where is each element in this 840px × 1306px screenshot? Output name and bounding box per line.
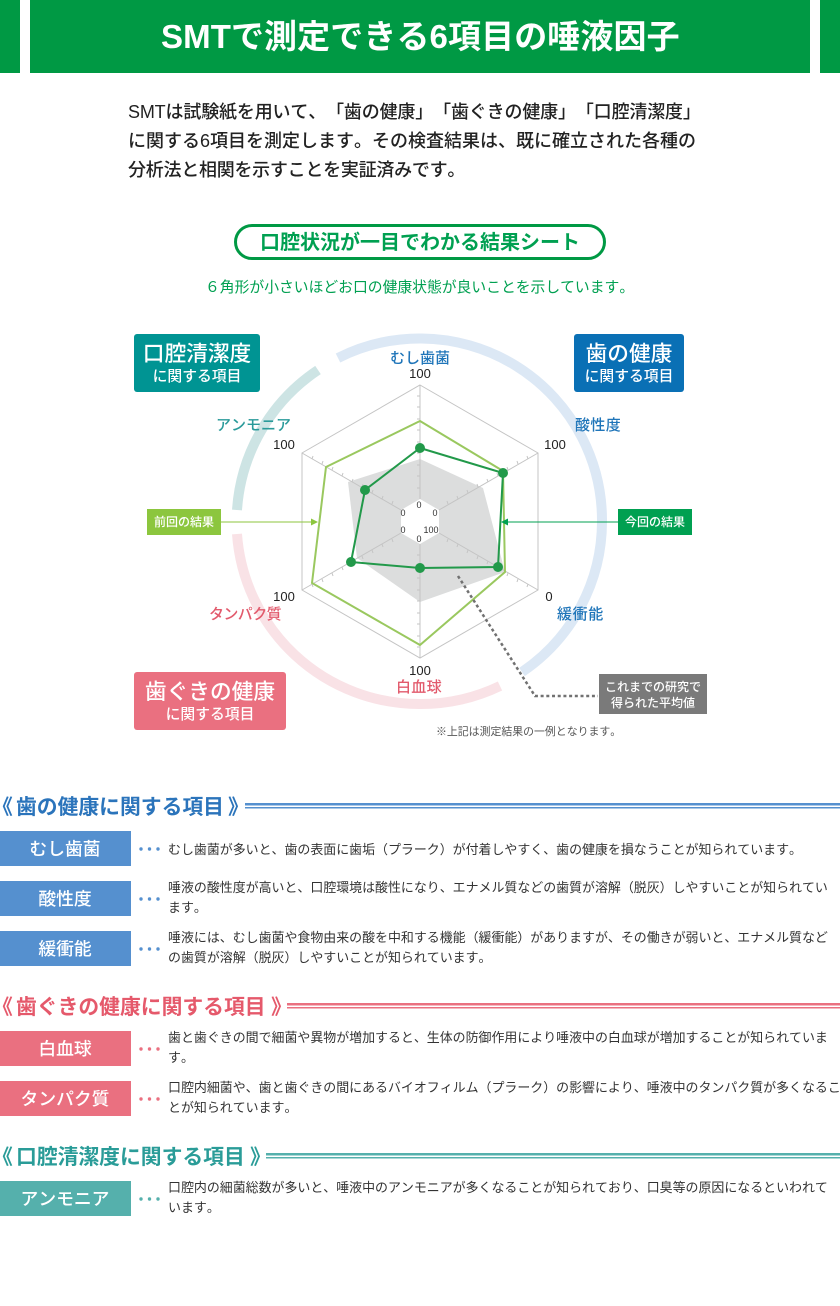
title: SMTで測定できる6項目の唾液因子	[161, 18, 680, 55]
axis label: 酸性度: 酸性度	[575, 417, 621, 434]
inner scale numbers: 100	[423, 525, 439, 535]
current result line	[346, 443, 508, 573]
axis label: タンパク質: タンパク質	[209, 605, 282, 623]
axes	[302, 385, 538, 658]
ring: gum health	[237, 534, 500, 704]
intro paragraph: に関する6項目を測定します。その検査結果は、既に確立された各種の	[128, 131, 696, 151]
item: むし歯菌: むし歯菌が多いと、歯の表面に歯垢（プラーク）が付着しやすく、歯の健康を損なうことが知られています。	[168, 842, 802, 857]
inner scale numbers: 0	[400, 508, 406, 518]
axis label: むし歯菌: むし歯菌	[390, 350, 450, 367]
item: アンモニア: アンモニア	[21, 1189, 109, 1209]
badge: tooth health	[574, 334, 684, 392]
item: 白血球	[0, 1030, 828, 1066]
inner scale numbers: 0	[432, 508, 438, 518]
callout: current result	[501, 509, 692, 535]
radar chart	[237, 338, 602, 704]
item: 白血球: 白血球	[38, 1039, 92, 1059]
ring: tooth health	[338, 338, 602, 672]
badge: cleanliness	[134, 334, 260, 392]
item: アンモニア: 口腔内の細菌総数が多いと、唾液中のアンモニアが多くなることが知られており、口臭等の原因になるといわれて	[168, 1180, 828, 1195]
item: 白血球: 歯と歯ぐきの間で細菌や異物が増加すると、生体の防御作用により唾液中の白血球が増加することが知られていま	[168, 1030, 828, 1045]
item: 白血球: す。	[168, 1050, 194, 1065]
section: gum health	[0, 995, 840, 1116]
badge: gum health	[134, 672, 286, 730]
section heading	[0, 1146, 840, 1169]
inner scale numbers: 0	[416, 500, 422, 510]
item: タンパク質: とが知られています。	[168, 1100, 297, 1115]
section heading: 歯の健康に関する項目	[16, 795, 224, 819]
axis label: 緩衝能: 緩衝能	[557, 606, 604, 623]
item: 緩衝能	[0, 930, 828, 966]
callout: average: 得られた平均値	[611, 695, 695, 710]
section heading: 歯ぐきの健康に関する項目	[16, 995, 266, 1019]
axis scale numbers: 100	[409, 366, 431, 381]
item: むし歯菌: むし歯菌	[29, 839, 101, 859]
previous result line	[312, 421, 505, 645]
section heading: 》	[250, 1146, 271, 1169]
item: 緩衝能: 緩衝能	[38, 939, 92, 959]
axis label: 白血球: 白血球	[396, 679, 442, 696]
hexagon frame	[302, 385, 538, 658]
axis scale numbers: 100	[273, 589, 295, 604]
badge: gum health: に関する項目	[166, 706, 254, 723]
average area	[348, 459, 505, 602]
section heading: 》	[271, 996, 292, 1019]
item: むし歯菌	[0, 831, 802, 866]
intro paragraph: SMTは試験紙を用いて、「歯の健康」「歯ぐきの健康」「口腔清潔度」	[128, 102, 701, 122]
section heading	[0, 995, 840, 1019]
intro paragraph	[128, 102, 701, 180]
item: タンパク質: タンパク質	[21, 1089, 109, 1109]
inner scale numbers: 0	[400, 525, 406, 535]
chart footnote: ※上記は測定結果の一例となります。	[436, 724, 621, 738]
item: タンパク質	[0, 1080, 840, 1116]
item: 酸性度: 唾液の酸性度が高いと、口腔環境は酸性になり、エナメル質などの歯質が溶解（脱灰）しやすいことが知られてい	[168, 880, 828, 895]
callout: average	[458, 576, 707, 714]
ring: cleanliness	[237, 370, 318, 510]
section heading: 口腔清潔度に関する項目	[16, 1146, 245, 1169]
badge: gum health: 歯ぐきの健康	[145, 679, 275, 704]
axis scale numbers: 100	[544, 437, 566, 452]
badge: tooth health: 歯の健康	[586, 341, 672, 366]
item: アンモニア	[0, 1180, 828, 1216]
result sheet capsule heading	[236, 226, 604, 258]
inner hexagon	[401, 499, 439, 544]
badge: cleanliness: 口腔清潔度	[143, 341, 251, 366]
inner scale numbers	[400, 500, 439, 544]
axis label: アンモニア: アンモニア	[216, 417, 291, 434]
section: tooth health	[0, 795, 840, 966]
callout: previous result	[147, 509, 318, 535]
item: 緩衝能: 唾液には、むし歯菌や食物由来の酸を中和する機能（緩衝能）がありますが、その働きが弱いと、エナメル質など	[168, 930, 828, 945]
badge: tooth health: に関する項目	[585, 368, 673, 385]
capsule subtitle: ６角形が小さいほどお口の健康状態が良いことを示しています。	[205, 279, 634, 296]
section: cleanliness	[0, 1146, 840, 1216]
axis scale numbers: 0	[545, 589, 553, 604]
badge: cleanliness: に関する項目	[153, 368, 241, 385]
item: アンモニア: います。	[168, 1200, 220, 1215]
header band	[0, 0, 840, 73]
callout: average: これまでの研究で	[605, 679, 701, 694]
axis scale numbers	[273, 366, 566, 678]
section heading: 》	[228, 796, 249, 819]
item: 緩衝能: の歯質が溶解（脱灰）しやすいことが知られています。	[168, 950, 491, 965]
item: 酸性度: 酸性度	[38, 889, 92, 909]
section heading	[0, 795, 840, 819]
result sheet capsule heading: 口腔状況が一目でわかる結果シート	[260, 230, 580, 254]
item: 酸性度: ます。	[168, 900, 207, 915]
callout: previous result: 前回の結果	[154, 514, 214, 529]
callout: current result: 今回の結果	[625, 514, 685, 529]
item: タンパク質: 口腔内細菌や、歯と歯ぐきの間にあるバイオフィルム（プラーク）の影響により、唾液中のタンパク質が多くなるこ	[168, 1080, 840, 1095]
inner scale numbers: 0	[416, 534, 422, 544]
axis scale numbers: 100	[409, 663, 431, 678]
axis scale numbers: 100	[273, 437, 295, 452]
item: 酸性度	[0, 880, 828, 916]
intro paragraph: 分析法と相関を示すことを実証済みです。	[128, 160, 465, 180]
